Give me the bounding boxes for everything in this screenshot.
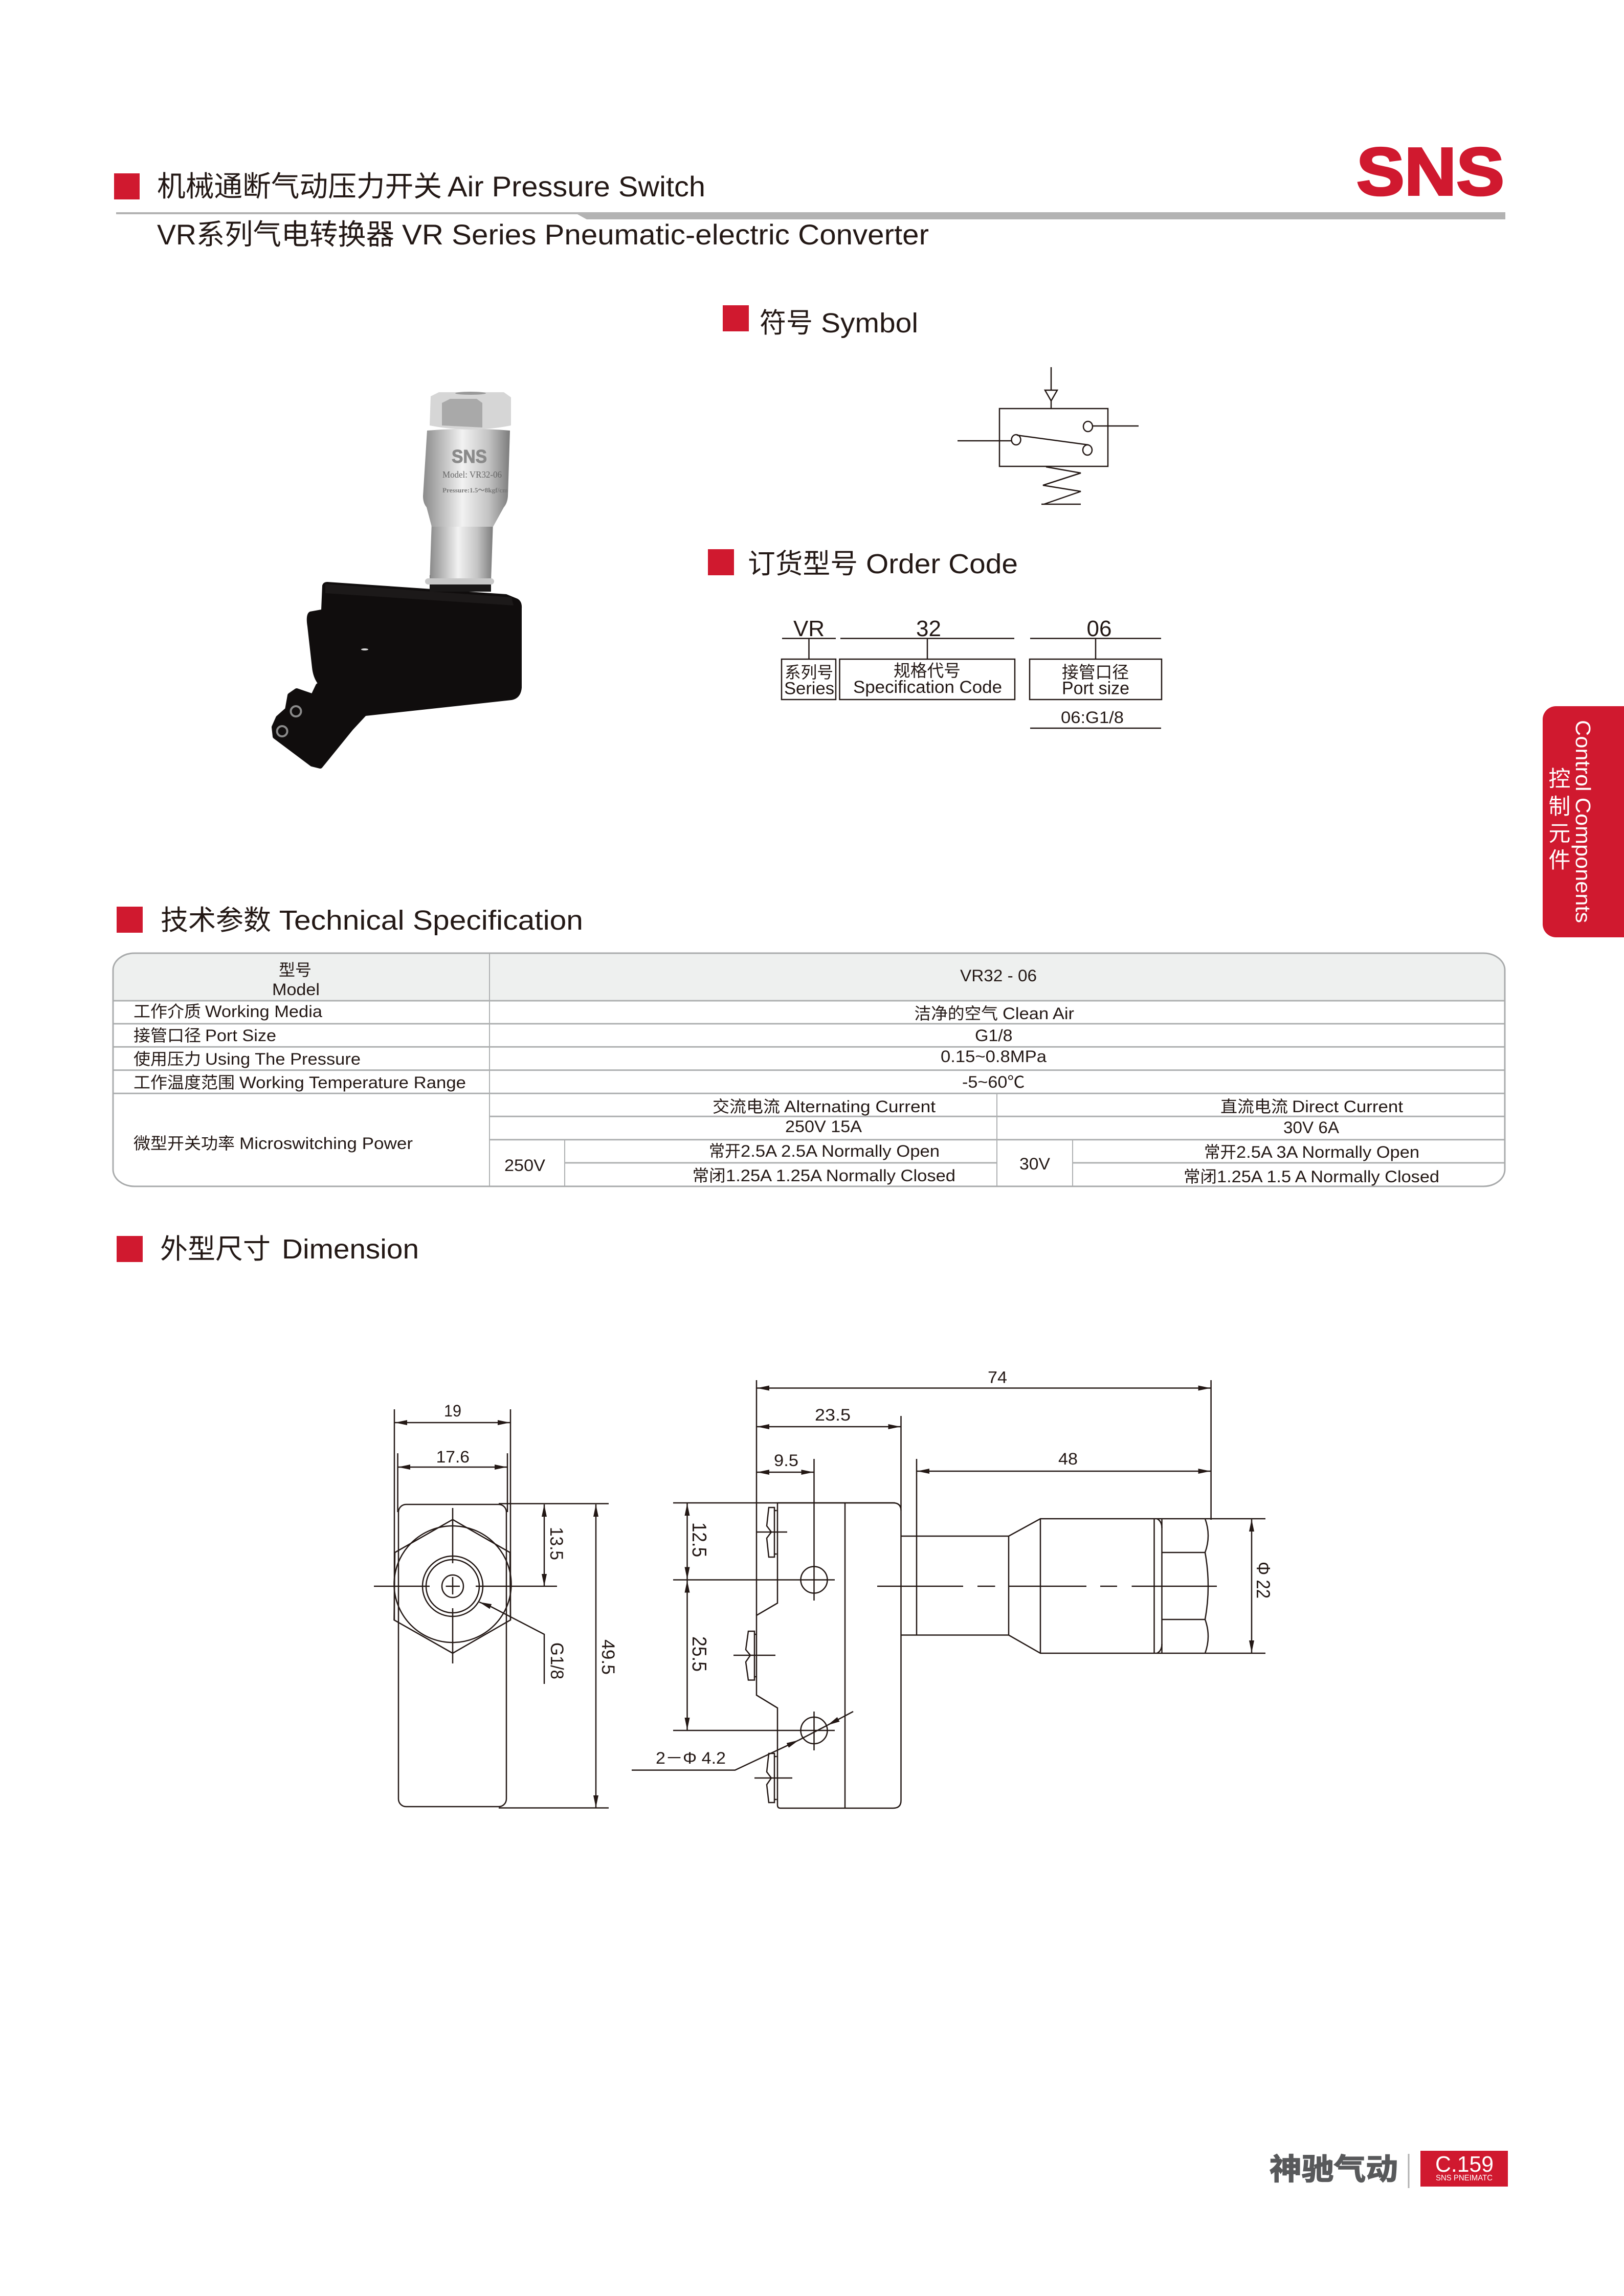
spec values: 0.15~0.8MPa [941, 1047, 1047, 1066]
SNS logo: SNS [1356, 134, 1504, 209]
AC power column: 交流电流 [713, 1097, 780, 1116]
order code diagram: 06 [1087, 616, 1111, 641]
switch body outline [757, 1503, 901, 1808]
dimension arrows [757, 1387, 1211, 1389]
row labels: 型号 [279, 961, 312, 979]
header: sub title [157, 218, 929, 251]
row labels: Model [272, 980, 320, 999]
AC power column: 250V 15A [785, 1117, 862, 1136]
header: main title: Air Pressure Switch [448, 170, 705, 202]
heading: order code [708, 549, 1018, 579]
heading: technical specification: Technical Specification [279, 905, 583, 936]
DC power column: 直流电流 [1220, 1097, 1288, 1116]
footer: divider [1408, 2154, 1410, 2188]
heading: order code: 订货型号 [748, 549, 858, 579]
end view dimension labels: 17.6 [436, 1448, 470, 1466]
side view dimension labels: 12.5 [688, 1522, 710, 1557]
AC power column: 1.25A 1.25A Normally Closed [726, 1166, 955, 1185]
order code diagram: Specification Code [853, 678, 1002, 697]
side tab: control components: 控 [1549, 767, 1570, 792]
header: red marker [114, 173, 140, 199]
DC power column: 常闭 [1184, 1167, 1217, 1186]
order code diagram: 系列号 [785, 663, 833, 682]
table outline [113, 953, 1505, 1186]
dimension drawing: end view [374, 1409, 609, 1808]
heading: technical specification: 技术参数 [161, 905, 271, 936]
side view dimension labels: 25.5 [688, 1636, 710, 1672]
row labels: Using The Pressure [205, 1050, 361, 1068]
extension lines [756, 1380, 757, 1615]
order code diagram: Port size [1062, 678, 1129, 699]
side tab: control components: 制 [1549, 795, 1570, 819]
heading: dimension: Dimension [282, 1234, 419, 1265]
AC power column: Alternating Current [784, 1097, 936, 1116]
row labels: Working Temperature Range [239, 1073, 466, 1092]
side view dimension labels: 9.5 [774, 1451, 798, 1470]
heading: symbol [723, 305, 918, 339]
technical specification table [113, 953, 1505, 1186]
header: grey rule [116, 212, 1505, 219]
spec values: G1/8 [975, 1026, 1013, 1045]
end view dimension labels: 19 [444, 1402, 461, 1420]
DC power column: 30V [1019, 1155, 1051, 1173]
order code diagram: 规格代号 [894, 661, 961, 680]
spec values: -5~60℃ [962, 1073, 1025, 1091]
end view dimension labels [436, 1402, 618, 1679]
row labels: Microswitching Power [239, 1134, 413, 1153]
table header band [113, 953, 1505, 1001]
side view dimension labels: 2－Φ 4.2 [656, 1749, 726, 1767]
row labels: 使用压力 [134, 1050, 201, 1068]
heading: dimension [117, 1234, 419, 1265]
AC power column: 2.5A 2.5A Normally Open [741, 1142, 940, 1160]
spec values [915, 966, 1074, 1091]
side view dimension labels: 23.5 [815, 1406, 851, 1424]
side view dimension labels [656, 1368, 1274, 1767]
printed label: SNS [452, 446, 487, 467]
terminals [767, 1507, 776, 1557]
AC power column [504, 1097, 955, 1185]
side tab: control components: 件 [1549, 848, 1570, 873]
heading: symbol: 符号 [760, 308, 813, 339]
side tab: control components: Control Components [1571, 720, 1595, 923]
order code diagram: Series [784, 679, 834, 699]
heading: dimension: 外型尺寸 [160, 1234, 271, 1265]
DC power column: 2.5A 3A Normally Open [1236, 1143, 1419, 1161]
spec values: Clean Air [1003, 1004, 1074, 1023]
order code diagram: 06:G1/8 [1061, 708, 1124, 727]
footer: page badge: C.159 [1435, 2152, 1494, 2177]
header: main title: 机械通断气动压力开关 [157, 170, 442, 202]
DC power column: 1.25A 1.5 A Normally Closed [1217, 1167, 1439, 1186]
aluminium cylinder [423, 429, 510, 527]
row labels: Port Size [205, 1026, 276, 1045]
end view dimension labels: 49.5 [598, 1639, 618, 1675]
pressure port profile [901, 1519, 1211, 1653]
footer: brand name: 神驰气动 [1270, 2153, 1398, 2186]
heading: symbol: Symbol [821, 308, 918, 339]
product photo: pressure switch [274, 392, 522, 766]
header: sub title: VR Series Pneumatic-electric Converter [402, 218, 929, 251]
metal stem [430, 575, 491, 592]
mounting holes [801, 1567, 828, 1593]
AC power column: 250V [504, 1156, 546, 1175]
AC power column: 常闭 [693, 1166, 726, 1185]
side tab: control components [1543, 706, 1624, 937]
order code diagram: 32 [916, 616, 941, 641]
side view dimension labels: Φ 22 [1253, 1562, 1274, 1599]
heading: order code: Order Code [866, 549, 1018, 579]
row labels: 工作温度范围 [134, 1073, 235, 1092]
product photo: pressure switch: Model: VR32-06 [442, 469, 502, 480]
black switch body [307, 582, 522, 716]
row labels: 工作介质 [134, 1002, 201, 1021]
side view dimension labels: 74 [988, 1368, 1007, 1387]
table grid [113, 953, 1505, 1186]
center line [877, 1586, 1217, 1587]
DC power column [1019, 1097, 1439, 1186]
pneumatic symbol diagram [958, 367, 1139, 504]
row labels: Working Media [205, 1002, 322, 1021]
order code diagram [782, 616, 1162, 728]
product photo: pressure switch: Pressure:1.5～8kgf/cm [442, 486, 508, 494]
row labels [134, 961, 466, 1153]
diameter leader [632, 1740, 799, 1770]
header: sub title: VR系列气电转换器 [157, 218, 394, 251]
DC power column: 30V 6A [1283, 1118, 1340, 1137]
AC power column: 常开 [709, 1142, 741, 1160]
order code diagram: VR [793, 616, 825, 641]
row labels: 微型开关功率 [134, 1134, 235, 1153]
dimension drawing: side view [632, 1380, 1265, 1808]
spec values: VR32 - 06 [960, 966, 1037, 985]
footer: page badge: SNS PNEIMATC [1436, 2174, 1493, 2182]
footer: page badge [1420, 2151, 1508, 2187]
end view dimension labels: 13.5 [546, 1527, 566, 1560]
hex nut [430, 392, 511, 430]
end view dimension labels: G1/8 [547, 1642, 567, 1679]
DC power column: Direct Current [1292, 1097, 1403, 1116]
order code diagram: 接管口径 [1062, 663, 1129, 682]
DC power column: 常开 [1204, 1143, 1236, 1161]
side view dimension labels: 48 [1058, 1450, 1078, 1468]
row labels: 接管口径 [134, 1026, 201, 1045]
header: main title [157, 170, 705, 202]
terminals [274, 686, 364, 766]
spec values: 洁净的空气 [915, 1004, 998, 1023]
heading: technical specification [117, 905, 583, 936]
side tab: control components: 元 [1549, 822, 1570, 846]
